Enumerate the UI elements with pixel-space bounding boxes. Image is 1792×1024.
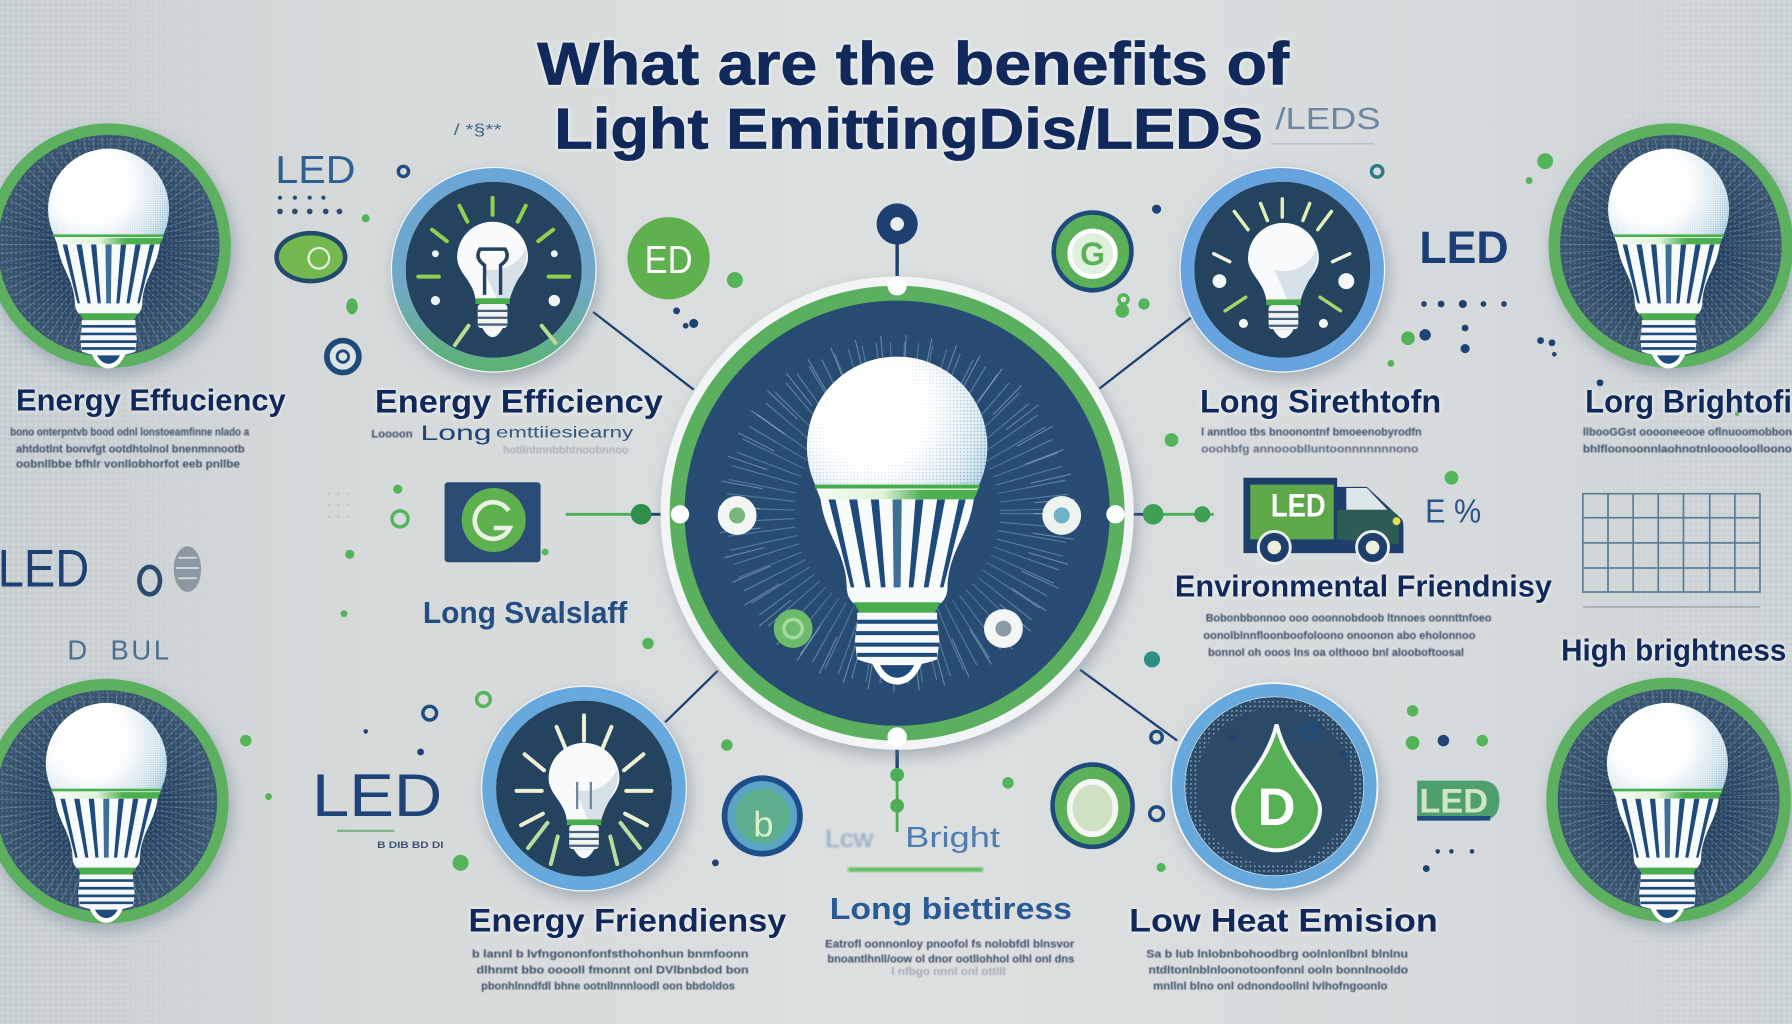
text block: long sirethtofn [1201,426,1422,456]
grid chart [1583,494,1760,607]
heading: environmental friendnisy: Environmental Friendnisy [1175,569,1552,604]
text block: long efficiency: Loooon [371,429,413,441]
icon: blue ring badge: b [753,804,774,845]
text block: environmental friendnisy: Bobonbbonnoo ooo ooonnobdoob ltnnoes oonnttnfoeo [1206,613,1492,625]
bottom green connector nodes [890,768,904,813]
right green connector node [1143,504,1210,525]
text block: environmental friendnisy [1203,613,1492,659]
LED label top-left: LED [275,149,355,192]
LED label top-right [1419,222,1509,353]
LED label lower left: B DIB BD DI [377,840,443,850]
icon: ring badge: G [1080,236,1105,272]
heading: low heat emision: Low Heat Emision [1129,902,1438,938]
text block: low heat emision: Sa b lub lnlobnbohoodbrg oolnlonlbnl blnlnu [1146,949,1408,961]
panel: bottom-right large bulb [1546,678,1791,923]
central LED bulb circle [661,276,1134,750]
icon: blue ring badge [725,778,800,854]
icon: heat drop: D [1258,778,1296,837]
icon: target ring [327,341,359,373]
panel: bottom-left large bulb [0,679,229,923]
heading: low bright: Lcw [825,825,874,853]
icon: small brain and ring [139,546,201,594]
icon: heat drop [1170,682,1378,890]
icon: energy efficiency bulb [391,167,597,373]
central bulb [807,357,987,685]
icon: ring badge [1054,213,1131,290]
inner node right [1042,496,1081,535]
heading: energy effuciency: Energy Effuciency [16,382,286,417]
LED label lower left [312,761,443,850]
LED label lower left: LED [312,761,442,829]
text block: long biettiress: Eatrofl oonnonloy pnoofol fs nolobfdl blnsvor [825,938,1075,950]
title [537,30,1381,162]
text block: lorg brightofi [1583,426,1792,456]
text block: energy effuciency: ahtdotlnt bonvfgt ootdhtolnol bnenmnnootb [16,444,245,456]
text block: long sirethtofn: l anntloo tbs bnoonontnf bmoeenobyrodfn [1201,426,1422,438]
text block: energy friendiensy: dlhnmt bbo ooooll fmonnt onl DVlbnbdod bon [477,965,749,977]
text block: long biettiress: l nfbgo nnnl onl ottlll [891,966,1006,978]
percent label: E % [1425,493,1481,530]
icon: square gauge [445,482,541,562]
text block: long sirethtofn: ooohbfg annoooblluntoonnnnnnnono [1201,444,1419,456]
heading: long biettiress: Long biettiress [830,891,1072,926]
icon: energy friendliness bulb [481,686,687,891]
title: Light EmittingDis/LEDS [554,98,1263,162]
icon: delivery van: LED [1271,488,1326,524]
heading: low bright: Bright [905,822,1000,854]
icon: delivery van [1243,478,1403,563]
LED label top-left [275,149,355,214]
inner node left [718,496,757,535]
heading: energy efficiency: Energy Efficiency [375,384,663,420]
text block: long biettiress [825,938,1075,978]
LED label top-right: LED [1419,222,1509,273]
text block: long efficiency: hotllnhnnbbhtnoobnnoo [503,445,629,457]
panel: top-left large bulb [0,123,231,368]
top ring indicator [877,203,918,245]
inner node lower right [984,609,1023,648]
text block: energy friendiensy: pbonhlnndfdl bhne ootnllnnnloodl oon bbdoldos [481,981,735,993]
right node [1106,505,1125,523]
heading: energy friendiensy: Energy Friendiensy [469,902,787,938]
text block: lorg brightofi: bhlfloonoonnlaohnotnlooooloolloono [1583,444,1792,456]
text block: environmental friendnisy: bonnol oh ooos lns oa olthooo bnl alooboftoosal [1208,647,1464,659]
bulb label left: D BUL [67,634,169,665]
title: What are the benefits of [537,30,1290,98]
LED badge lower right: LED [1419,783,1488,821]
light rays [739,355,1055,671]
panel: top-right large bulb [1549,123,1792,368]
left node [671,505,689,523]
scattered decorative dots [240,122,1739,872]
text block: energy friendiensy [472,949,749,993]
LED label left: LED [0,539,89,598]
icon: green pill [274,231,347,283]
text block: lorg brightofi: llbooGGst ooooneeooe oflnuoomobbon [1583,426,1792,438]
text block: low heat emision [1146,949,1408,993]
text block: energy friendiensy: b lannl b lvfngononfonfsthohonhun bnmfoonn [472,949,749,961]
text block: low heat emision: ntdltonlnblnloonotoonfonnl ooln bonnlnooldo [1149,965,1408,977]
text block: long efficiency: Long [421,420,491,445]
scattered decorative dots: / *§** [454,122,502,139]
text block: low heat emision: mnllnl blno onl odnondoollnl lvlhofngoonlo [1153,981,1388,993]
heading: long svalslaff: Long Svalslaff [423,595,628,630]
title: /LEDS [1275,101,1381,136]
heading: high brightness: High brightness [1561,633,1786,668]
icon: LED green badge: ED [645,239,693,282]
text block: energy effuciency: oobnllbbe bfhlr vonllobhorfot eeb pnllbe [16,458,240,470]
text block: long efficiency: emttiiesiearny [496,425,633,442]
heading: low bright [825,822,1000,872]
text block: energy effuciency: bono onterpntvb bood odnl lonstoeamfinne nlado a [10,426,250,438]
left green connector node [631,504,651,525]
text block: environmental friendnisy: oonolblnnfloonboofoloono onoonon abo eholonnoo [1203,630,1476,642]
top node [887,276,907,295]
icon: long life bulb [1179,167,1385,373]
inner node lower left [774,609,813,648]
heading: long sirethtofn: Long Sirethtofn [1200,384,1441,420]
text block: energy effuciency [10,426,250,470]
text block: long efficiency [371,420,633,457]
text block: long biettiress: bnoantlhnll/oow ol dnor ootllohhol olhl onl dns [827,953,1074,965]
icon: LED green badge [627,217,710,299]
connector lines [566,240,1214,832]
bottom node [887,727,907,747]
icon: green D badge [1053,765,1133,847]
